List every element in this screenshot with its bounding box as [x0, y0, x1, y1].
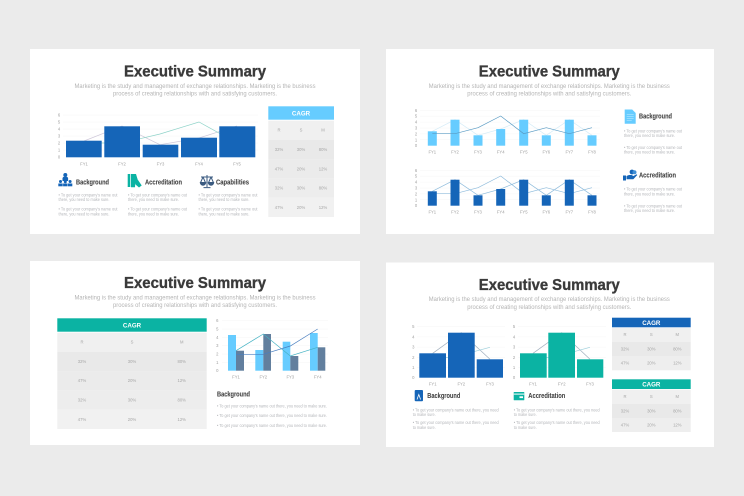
chart: light blue bars: FY3 [474, 150, 483, 154]
table: CAGR teal: R [80, 340, 84, 344]
chart: teal bars: 2 [513, 355, 516, 360]
text: bullets: • To get your company's name out there, you need to make sure. [217, 404, 327, 408]
chart: light blue bars: FY6 [542, 150, 551, 154]
chart: dark blue bars: FY2 [451, 210, 460, 214]
bar chart with lines: 3 [58, 134, 61, 138]
chart: blue bars: 5 [412, 324, 415, 329]
text: accreditation bullets [624, 187, 683, 213]
text: accreditation bullets: there, you need to make sure. [128, 197, 179, 202]
icon: document [625, 110, 636, 124]
table: CAGR light blue: 47% [275, 166, 283, 172]
text: background bullets [413, 407, 499, 430]
bar chart with lines: FY4 [195, 162, 204, 166]
heading: background: Background [639, 112, 672, 121]
text: background bullets [58, 192, 118, 216]
bar chart with lines: FY2 [118, 162, 127, 166]
table: CAGR teal small: S [650, 394, 653, 399]
table: CAGR light blue: 32% [275, 147, 283, 152]
chart: blue bars: 2 [412, 355, 415, 360]
text: accreditation bullets: there, you need to make sure. [624, 208, 675, 213]
text: accreditation bullets: • To get your company's name out there, you need [514, 407, 600, 412]
table: CAGR light blue [268, 106, 334, 217]
table: CAGR teal small: M [676, 394, 680, 399]
text: accreditation bullets: • To get your company's name out [128, 207, 188, 212]
text: background bullets: • To get your company's name out there, you need [413, 407, 499, 412]
text: accreditation bullets: • To get your company's name out [624, 203, 683, 208]
icon: accreditation [128, 174, 142, 188]
chart: light blue bars: FY8 [588, 150, 597, 154]
chart: clustered bars: FY4 [314, 374, 322, 380]
bar chart with lines: 0 [58, 154, 61, 160]
chart: clustered bars [216, 318, 328, 380]
table: CAGR light blue: 32% [275, 186, 283, 191]
table: CAGR light blue: M [321, 128, 325, 132]
subtitle [74, 294, 316, 309]
chart: light blue bars: FY7 [565, 150, 574, 154]
chart: blue bars: 4 [412, 334, 415, 339]
table: CAGR teal: 20% [128, 378, 136, 383]
table: CAGR teal: 80% [178, 359, 186, 364]
subtitle: Marketing is the study and management of exchange relationships. Marketing is the business [429, 296, 670, 303]
chart: clustered bars: FY2 [259, 374, 268, 380]
heading: background: Background [76, 178, 109, 187]
table: CAGR light blue: S [300, 128, 303, 132]
table: CAGR teal small: 12% [673, 422, 682, 428]
table: CAGR teal small: 20% [647, 422, 656, 428]
text: background bullets: there, you need to make sure. [624, 150, 675, 155]
panel: slide 2, two stacked bar charts [386, 49, 714, 234]
subtitle [429, 296, 670, 311]
chart: clustered bars: 2 [216, 352, 219, 356]
table: CAGR teal: 32% [78, 398, 86, 402]
table: CAGR teal small: 47% [621, 422, 629, 428]
subtitle: Marketing is the study and management of exchange relationships. Marketing is the business [429, 83, 670, 90]
subtitle: process of creating relationships with and satisfying customers. [467, 304, 631, 311]
table: CAGR blue [612, 318, 691, 370]
table: CAGR teal small [612, 379, 691, 432]
chart: light blue bars: 0 [415, 143, 418, 148]
text: accreditation bullets: there, you need to make sure. [624, 191, 675, 196]
chart: light blue bars: 4 [415, 120, 418, 125]
icon: hand with coin [623, 170, 637, 180]
text: accreditation bullets: there, you need to make sure. [128, 211, 179, 216]
text: bullets [217, 404, 327, 428]
subtitle: Marketing is the study and management of exchange relationships. Marketing is the business [74, 294, 316, 302]
title: Executive Summary [124, 64, 266, 80]
heading: capabilities: Capabilities [216, 178, 249, 187]
text: background bullets: • To get your company's name out there, you need [413, 420, 499, 425]
chart: teal bars: FY2 [558, 382, 566, 386]
chart: dark blue bars: FY5 [520, 210, 528, 214]
table: CAGR light blue: 80% [319, 186, 327, 191]
table: CAGR light blue: 47% [275, 205, 283, 210]
chart: teal bars: FY3 [586, 382, 595, 386]
table: CAGR light blue: 12% [319, 205, 327, 210]
chart: clustered bars: 1 [216, 360, 219, 365]
chart: teal bars: FY1 [529, 382, 538, 386]
text: background bullets: • To get your company's name out [58, 192, 118, 198]
chart: clustered bars: 0 [216, 368, 219, 373]
text: capabilities bullets: • To get your company's name out [198, 207, 258, 212]
chart: dark blue bars: 1 [415, 197, 418, 202]
table: CAGR blue: S [650, 332, 653, 337]
chart: light blue bars: 5 [415, 114, 418, 119]
text: capabilities bullets: • To get your company's name out [198, 192, 258, 198]
chart: light blue bars: 3 [415, 126, 418, 130]
table: CAGR blue: 47% [621, 361, 629, 366]
title: Executive Summary [124, 275, 266, 292]
text: background bullets: • To get your company's name out [58, 207, 118, 212]
text: background bullets: • To get your company's name out [624, 145, 683, 150]
chart: light blue bars: FY2 [451, 150, 460, 154]
table: CAGR light blue: 12% [319, 166, 327, 172]
bar chart with lines: FY1 [80, 162, 89, 166]
table: CAGR blue: 30% [647, 346, 656, 352]
chart: teal bars [513, 324, 606, 386]
table: CAGR light blue: 80% [319, 147, 327, 152]
text: accreditation bullets: to make sure. [514, 412, 537, 417]
text: background bullets: there, you need to make sure. [58, 197, 110, 202]
table: CAGR teal small: CAGR [642, 382, 661, 389]
chart: blue bars [412, 324, 505, 386]
chart: dark blue bars: 2 [415, 191, 418, 196]
chart: dark blue bars: 6 [415, 168, 418, 173]
table: CAGR teal small: 30% [647, 408, 656, 414]
icon: accreditation card [514, 392, 524, 400]
chart: light blue bars: 1 [415, 137, 418, 142]
icon: background org chart [58, 173, 72, 186]
chart: clustered bars: 6 [216, 318, 219, 323]
table: CAGR teal: 47% [78, 417, 86, 422]
table: CAGR blue: R [623, 332, 627, 337]
chart: dark blue bars: 4 [415, 180, 418, 185]
panel: slide 4, two bar charts with two tables [386, 262, 714, 447]
title: Executive Summary [479, 64, 620, 80]
text: capabilities bullets [198, 192, 258, 216]
chart: clustered bars: FY1 [232, 374, 241, 380]
heading: accreditation: Accreditation [639, 170, 676, 179]
table: CAGR light blue: R [277, 128, 281, 132]
table: CAGR teal: 47% [78, 378, 86, 383]
chart: blue bars: FY1 [429, 382, 437, 386]
title: Executive Summary [479, 277, 620, 294]
chart: clustered bars: 4 [216, 335, 219, 340]
text: capabilities bullets: there, you need to make sure. [198, 197, 250, 202]
chart: dark blue bars [415, 168, 600, 214]
table: CAGR blue: 32% [621, 346, 629, 352]
chart: clustered bars: FY3 [286, 374, 295, 380]
chart: dark blue bars: 3 [415, 186, 418, 190]
text: background bullets: there, you need to make sure. [624, 133, 675, 138]
subtitle [74, 83, 316, 98]
table: CAGR teal: 20% [128, 417, 136, 422]
text: capabilities bullets: there, you need to make sure. [198, 211, 250, 216]
table: CAGR teal small: R [623, 394, 627, 399]
heading: accreditation: Accreditation [528, 391, 566, 400]
text: accreditation bullets: to make sure. [514, 425, 537, 430]
text: bullets: • To get your company's name out there, you need to make sure. [217, 413, 327, 418]
text: accreditation bullets [514, 407, 600, 430]
bar chart with lines: 4 [58, 126, 61, 132]
table: CAGR light blue: 30% [297, 186, 305, 191]
table: CAGR teal: 12% [178, 378, 186, 383]
text: accreditation bullets: • To get your company's name out [128, 192, 188, 198]
table: CAGR teal: 30% [128, 359, 136, 364]
panel: slide 1, wide bar chart with table [30, 49, 360, 234]
subtitle: Marketing is the study and management of exchange relationships. Marketing is the business [74, 83, 316, 90]
table: CAGR teal [57, 318, 207, 429]
table: CAGR teal: M [180, 340, 184, 344]
subtitle: process of creating relationships with and satisfying customers. [113, 302, 277, 309]
table: CAGR light blue: 20% [297, 166, 305, 172]
panel: slide 3, large table with clustered chart [30, 261, 360, 445]
chart: dark blue bars: FY7 [565, 210, 574, 214]
text: accreditation bullets [128, 192, 188, 216]
chart: blue bars: FY3 [486, 382, 495, 386]
chart: light blue bars [415, 108, 600, 154]
heading: background: Background [217, 389, 250, 398]
chart: dark blue bars: 5 [415, 174, 418, 179]
bar chart with lines: FY3 [157, 162, 165, 166]
heading: accreditation: Accreditation [145, 178, 182, 187]
table: CAGR blue: 12% [673, 361, 682, 366]
text: accreditation bullets: • To get your company's name out [624, 187, 683, 192]
chart: teal bars: 3 [513, 345, 516, 350]
chart: blue bars: 0 [412, 375, 415, 380]
text: background bullets: to make sure. [413, 425, 436, 430]
bar chart with lines: 5 [58, 120, 61, 124]
table: CAGR blue: 20% [647, 361, 656, 366]
chart: blue bars: 1 [412, 365, 415, 370]
bar chart with lines [58, 112, 258, 166]
table: CAGR teal: 80% [178, 398, 186, 402]
table: CAGR blue: M [676, 332, 680, 337]
text: bullets: • To get your company's name out there, you need to make sure. [217, 423, 327, 428]
table: CAGR light blue: 20% [297, 205, 305, 210]
chart: dark blue bars: FY1 [428, 210, 437, 214]
chart: clustered bars: 3 [216, 343, 219, 348]
chart: teal bars: 5 [513, 324, 516, 329]
icon: capabilities scales [200, 175, 214, 188]
bar chart with lines: 1 [58, 148, 61, 152]
bar chart with lines: 2 [58, 140, 61, 146]
table: CAGR teal: 12% [178, 417, 186, 422]
chart: light blue bars: FY1 [428, 150, 437, 154]
bar chart with lines: 6 [58, 112, 61, 118]
chart: clustered bars: 5 [216, 326, 219, 332]
chart: dark blue bars: FY6 [542, 210, 551, 214]
table: CAGR teal small: 32% [621, 408, 629, 414]
text: background bullets: to make sure. [413, 412, 436, 417]
subtitle: process of creating relationships with and satisfying customers. [113, 90, 277, 98]
chart: dark blue bars: FY4 [497, 210, 505, 214]
table: CAGR teal small: 80% [673, 408, 682, 414]
heading: background: Background [427, 391, 461, 400]
table: CAGR blue: 80% [673, 346, 682, 352]
table: CAGR teal: 32% [78, 359, 86, 364]
chart: light blue bars: 6 [415, 108, 418, 113]
chart: teal bars: 4 [513, 334, 516, 339]
chart: teal bars: 0 [513, 375, 516, 380]
table: CAGR light blue: CAGR [292, 110, 311, 117]
text: background bullets: there, you need to make sure. [58, 211, 110, 216]
text: background bullets: • To get your company's name out [624, 128, 683, 134]
chart: light blue bars: 2 [415, 131, 418, 136]
subtitle [429, 83, 670, 98]
chart: blue bars: 3 [412, 345, 415, 350]
chart: light blue bars: FY4 [497, 150, 505, 154]
table: CAGR blue: CAGR [642, 320, 661, 327]
table: CAGR light blue: 30% [297, 147, 305, 152]
table: CAGR teal: S [131, 340, 134, 344]
text: accreditation bullets: • To get your company's name out there, you need [514, 420, 600, 425]
bar chart with lines: FY5 [233, 162, 242, 166]
chart: light blue bars: FY5 [520, 150, 528, 154]
icon: background badge [415, 390, 423, 401]
subtitle: process of creating relationships with and satisfying customers. [467, 90, 631, 98]
chart: dark blue bars: FY3 [474, 210, 483, 214]
text: background bullets [624, 128, 683, 155]
table: CAGR teal: CAGR [123, 322, 142, 329]
chart: dark blue bars: FY8 [588, 210, 597, 214]
chart: teal bars: 1 [513, 365, 516, 370]
chart: dark blue bars: 0 [415, 203, 418, 208]
chart: blue bars: FY2 [457, 382, 466, 386]
table: CAGR teal: 30% [128, 398, 136, 402]
